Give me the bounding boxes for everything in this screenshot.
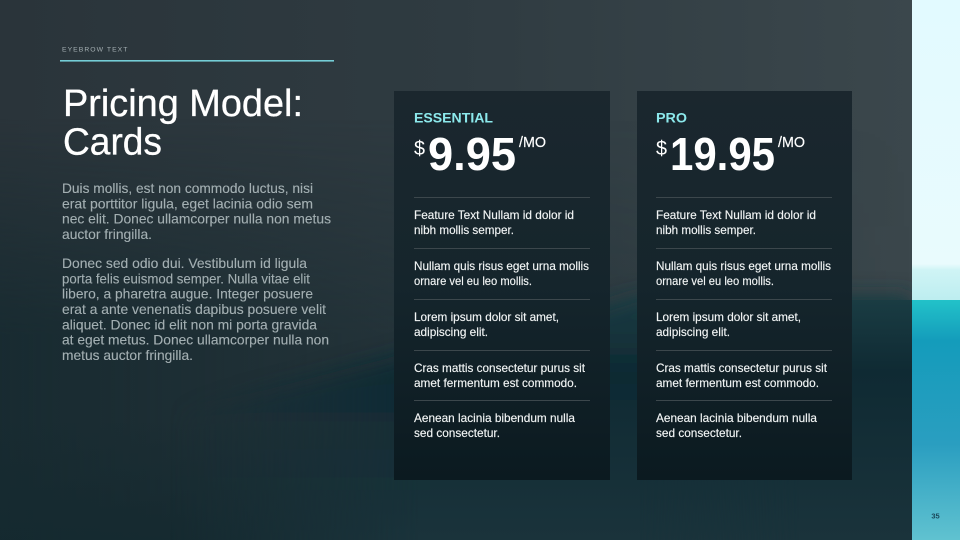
feature 2	[414, 259, 589, 288]
feature 1	[414, 208, 574, 237]
page number: 35	[931, 512, 940, 520]
feature 2: Nullam quis risus eget urna mollis	[656, 259, 831, 273]
feature 2: ornare vel eu leo mollis.	[656, 274, 774, 288]
feature 3: adipiscing elit.	[414, 325, 488, 339]
body text: nec elit. Donec ullamcorper nulla non metus	[62, 212, 331, 227]
body text: porta felis euismod semper. Nulla vitae elit	[62, 271, 310, 286]
feature 4: amet fermentum est commodo.	[414, 376, 577, 390]
feature 3: Lorem ipsum dolor sit amet,	[414, 310, 559, 324]
title	[63, 83, 303, 164]
panel: essential pricing card	[394, 91, 610, 480]
feature 5: Aenean lacinia bibendum nulla	[656, 411, 817, 425]
body text: erat a ante venenatis dapibus posuere velit	[62, 302, 326, 317]
title: Pricing Model:	[63, 83, 303, 125]
price: 19.95 per month: 19.95	[670, 128, 775, 180]
body text: at eget metus. Donec ullamcorper nulla non	[62, 333, 329, 348]
feature 4: Cras mattis consectetur purus sit	[656, 361, 828, 375]
feature 5	[656, 411, 817, 440]
body text: auctor fringilla.	[62, 227, 152, 242]
feature 3: adipiscing elit.	[656, 325, 730, 339]
feature 5: sed consectetur.	[656, 426, 742, 440]
panel: pro pricing card	[637, 91, 852, 480]
feature 2	[656, 259, 831, 288]
body text: aliquet. Donec id elit non mi porta gravida	[62, 317, 317, 332]
body text: metus auctor fringilla.	[62, 348, 193, 363]
plan name: pro: PRO	[656, 110, 687, 126]
body text: Donec sed odio dui. Vestibulum id ligula	[62, 256, 307, 271]
price: 19.95 per month: $	[656, 138, 667, 160]
background	[0, 0, 912, 448]
feature 1: nibh mollis semper.	[656, 223, 756, 237]
feature 4: Cras mattis consectetur purus sit	[414, 361, 586, 375]
feature 1: nibh mollis semper.	[414, 223, 514, 237]
plan name: essential: ESSENTIAL	[414, 110, 493, 126]
price: 9.95 per month	[414, 128, 546, 180]
feature 3	[414, 310, 559, 339]
eyebrow text: EYEBROW TEXT	[62, 46, 129, 54]
price: 9.95 per month: 9.95	[428, 128, 516, 180]
feature 3	[656, 310, 801, 339]
side strip	[912, 0, 960, 540]
body text	[62, 181, 331, 363]
feature 4: amet fermentum est commodo.	[656, 376, 819, 390]
feature 5: Aenean lacinia bibendum nulla	[414, 411, 575, 425]
feature 5	[414, 411, 575, 440]
body text: erat porttitor ligula, eget lacinia odio sem	[62, 196, 313, 211]
feature 5: sed consectetur.	[414, 426, 500, 440]
body text: Duis mollis, est non commodo luctus, nisi	[62, 181, 313, 196]
title: Cards	[63, 122, 162, 164]
price: 19.95 per month: /MO	[778, 135, 805, 151]
feature 4	[414, 361, 586, 390]
body text: libero, a pharetra augue. Integer posuere	[62, 287, 313, 302]
price: 9.95 per month: $	[414, 138, 425, 160]
feature 1: Feature Text Nullam id dolor id	[656, 208, 816, 222]
accent rule	[60, 60, 334, 62]
feature 3: Lorem ipsum dolor sit amet,	[656, 310, 801, 324]
feature 1	[656, 208, 816, 237]
feature 2: ornare vel eu leo mollis.	[414, 274, 532, 288]
feature 1: Feature Text Nullam id dolor id	[414, 208, 574, 222]
feature 4	[656, 361, 828, 390]
price: 9.95 per month: /MO	[519, 135, 546, 151]
feature 2: Nullam quis risus eget urna mollis	[414, 259, 589, 273]
